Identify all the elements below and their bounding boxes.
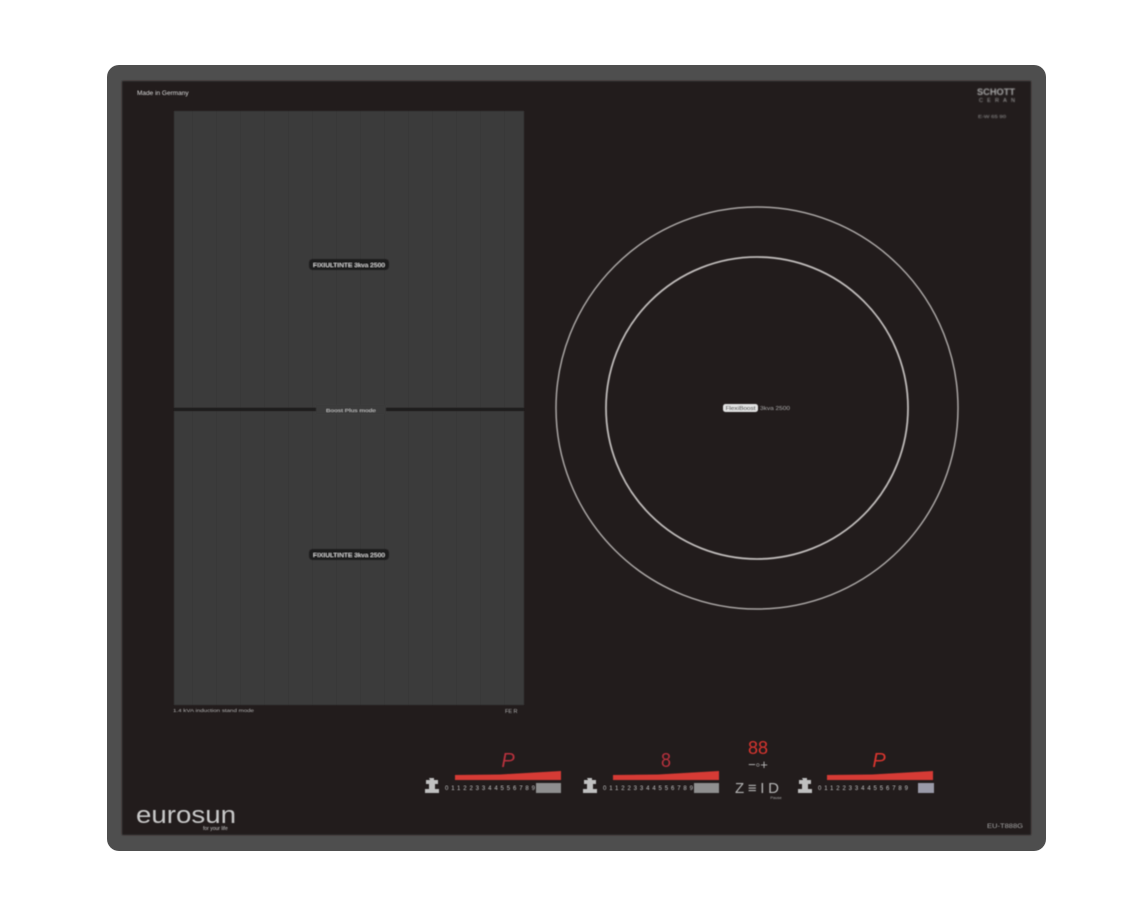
round cooking zone [556, 207, 958, 609]
control: timer and functions [735, 738, 782, 800]
zone icon [425, 778, 439, 793]
slider scale: 011223344556789 [818, 786, 909, 792]
note under flex zone: 1.4 kVA induction stand mode [173, 708, 255, 713]
boost tag [918, 783, 934, 793]
display P: P [501, 750, 515, 772]
label: made in Germany: Made in Germany [137, 90, 189, 97]
boost tag [536, 783, 561, 793]
small zone icons: FE R [505, 709, 518, 715]
divider label [316, 405, 386, 414]
front flex zone [174, 411, 524, 705]
inner ring [606, 257, 908, 559]
slider scale: 011223344556789 [445, 786, 536, 792]
power bar [455, 771, 561, 780]
display 8: 8 [661, 750, 671, 772]
rear zone badge: FIXIULTINTE 3kva 2500 [313, 263, 385, 269]
front zone badge: FIXIULTINTE 3kva 2500 [313, 553, 385, 559]
round zone badge [723, 404, 790, 412]
model number: EU-T888G [987, 823, 1023, 830]
flex zone divider [174, 408, 524, 410]
zone icon [583, 778, 597, 793]
logo: eurosun: for your life [203, 826, 228, 832]
front zone badge [309, 549, 389, 560]
power bar [827, 771, 933, 780]
panel: flexible zone left [174, 111, 524, 705]
rear flex zone [174, 111, 524, 408]
timer minus plus: −◦+ [748, 757, 768, 772]
pause label: Pause [770, 795, 782, 800]
glass surface [122, 81, 1031, 835]
rear zone badge [309, 259, 389, 270]
logo: Schott Ceran: CERAN [979, 98, 1015, 104]
round zone badge: 3kva 2500 [760, 406, 790, 412]
logo: eurosun: eurosun [136, 802, 236, 829]
control: middle zone [583, 750, 719, 793]
logo: Schott Ceran: SCHOTT [977, 87, 1016, 97]
divider label: Boost Plus mode [326, 408, 377, 413]
control: left zone [425, 750, 561, 793]
control: right zone [798, 750, 934, 793]
round zone badge: FlexiBoost [726, 406, 756, 412]
logo: Schott Ceran [977, 87, 1016, 119]
timer display: 88 [748, 738, 768, 758]
hob outer frame [107, 65, 1046, 851]
logo: Schott Ceran: E-W 65 90 [978, 114, 1007, 119]
display P: P [872, 750, 886, 772]
outer ring [556, 207, 958, 609]
boost tag [694, 783, 719, 793]
slider scale: 011223344556789 [603, 786, 694, 792]
function icons: Z≡ID [735, 780, 779, 797]
zone icon [798, 778, 812, 793]
power bar [613, 771, 719, 780]
